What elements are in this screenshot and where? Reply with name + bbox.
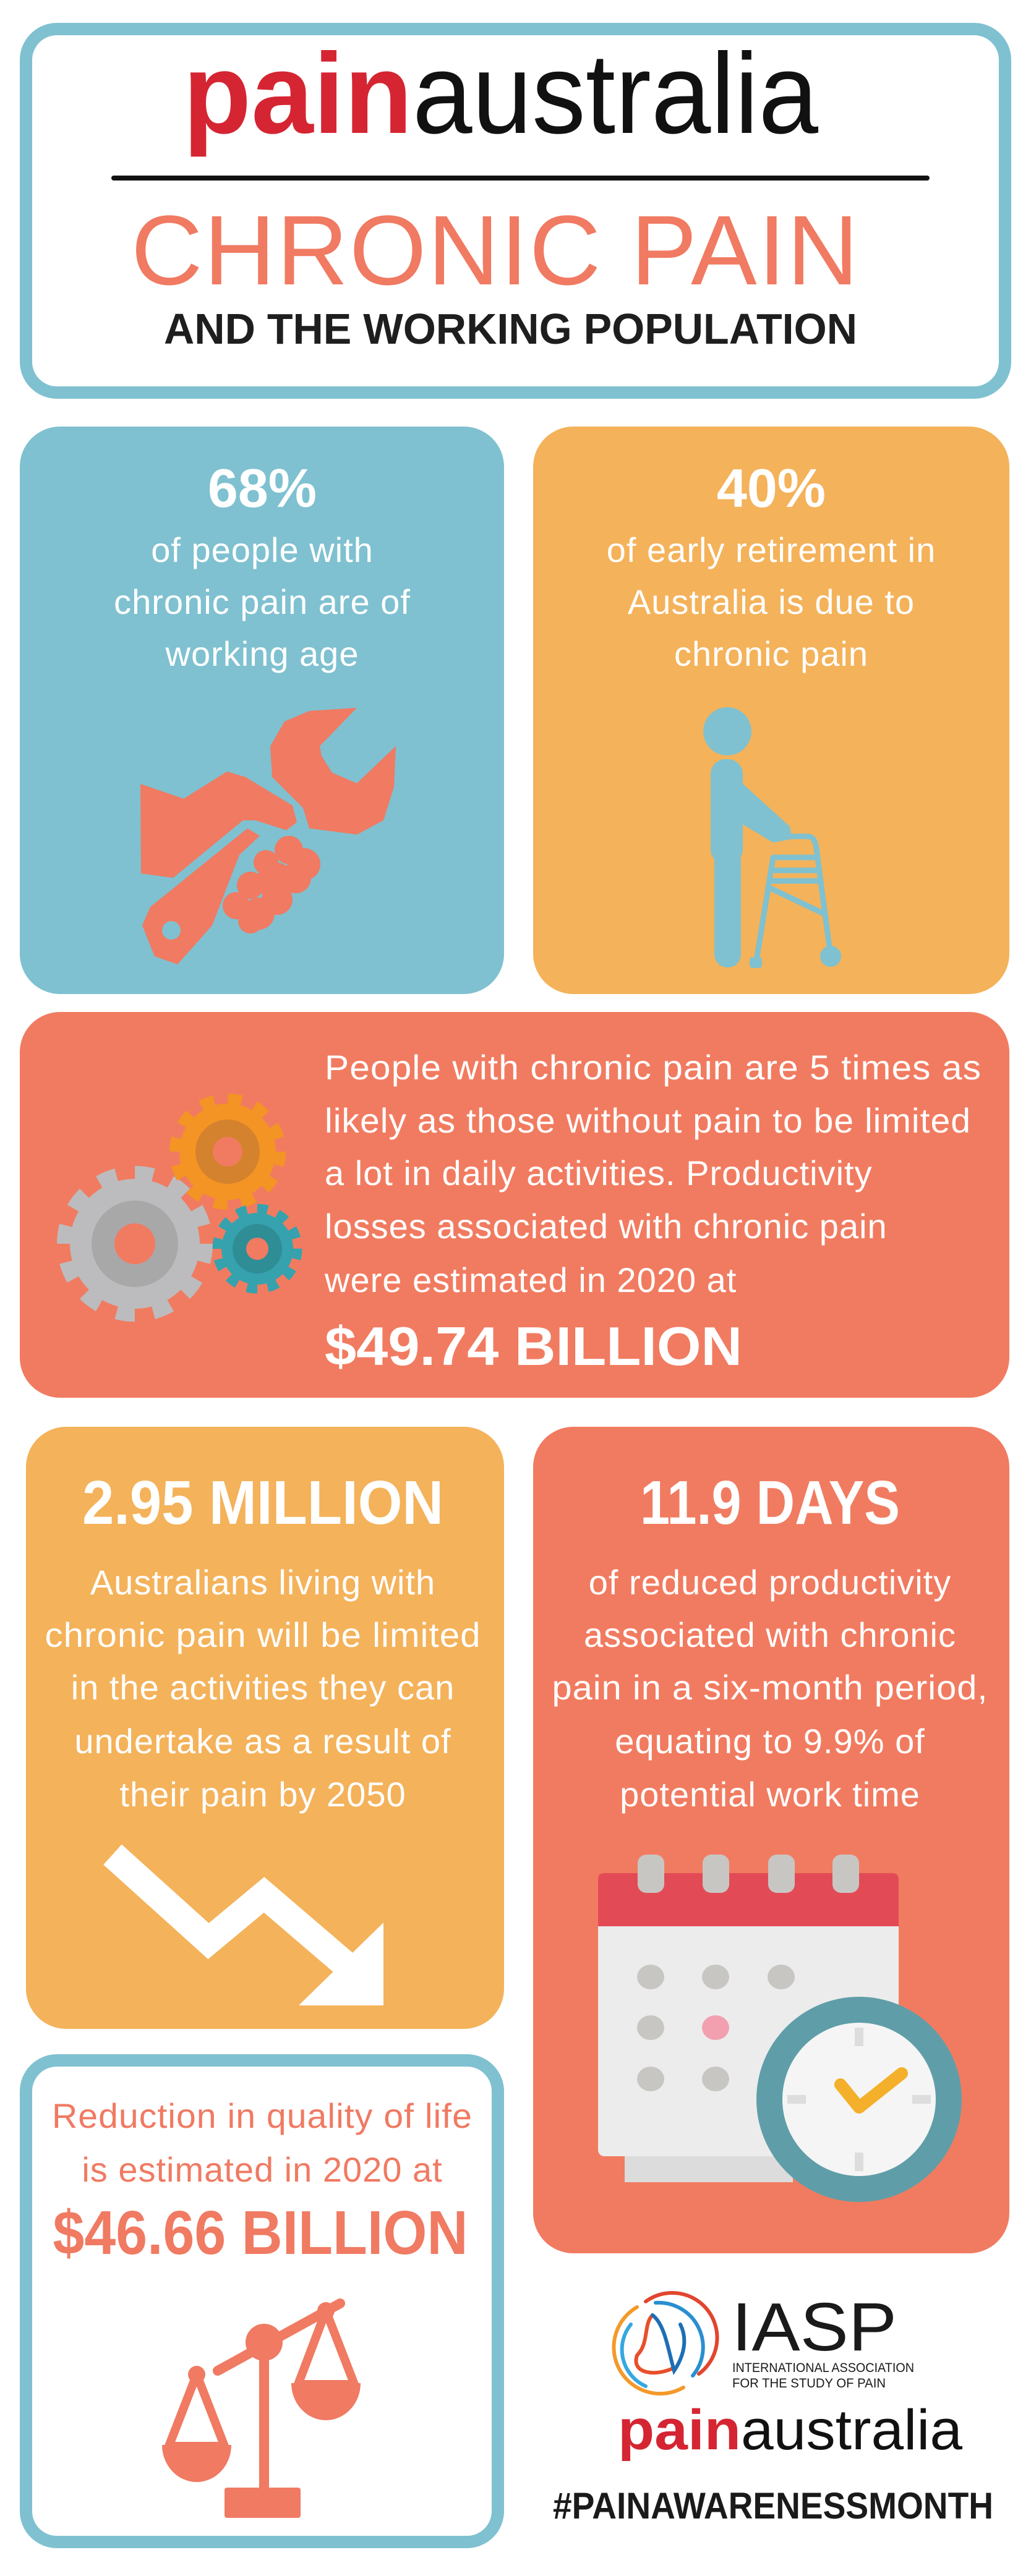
text block: their pain by 2050 (119, 1775, 406, 1814)
text block (324, 1048, 982, 1299)
text block: chronic pain are of (114, 582, 411, 621)
text block (45, 1563, 481, 1814)
icon: gears (64, 1099, 297, 1315)
text block: equating to 9.9% of (615, 1722, 925, 1761)
logo: IASP (614, 2289, 914, 2394)
subtitle: AND THE WORKING POPULATION (164, 305, 857, 353)
text block: undertake as a result of (74, 1722, 451, 1761)
text block: losses associated with chronic pain (325, 1207, 888, 1246)
logo: IASP: FOR THE STUDY OF PAIN (732, 2376, 886, 2391)
text block: potential work time (620, 1775, 920, 1814)
text block (552, 1563, 988, 1814)
icon: down trend arrow (113, 1855, 383, 2005)
icon: calendar with clock (598, 1855, 962, 2202)
panel: 68% working age (20, 427, 504, 994)
text block: working age (165, 634, 359, 673)
logo: IASP: INTERNATIONAL ASSOCIATION (732, 2361, 914, 2375)
icon: hand holding wrench (140, 708, 396, 964)
text block: Australians living with (90, 1563, 435, 1602)
logo: painaustralia bottom: pain (618, 2399, 741, 2462)
logo: IASP: IASP (732, 2289, 897, 2365)
header panel (26, 29, 1005, 393)
text block: Australia is due to (628, 582, 915, 621)
text block (114, 530, 411, 673)
text block: pain in a six-month period, (552, 1668, 988, 1707)
logo: painaustralia top: pain (183, 30, 413, 158)
logo: painaustralia bottom (618, 2399, 963, 2462)
icon: scales (162, 2302, 361, 2518)
text block: likely as those without pain to be limited (325, 1101, 971, 1140)
stat $46.66 BILLION: $46.66 BILLION (53, 2198, 468, 2268)
text block: Reduction in quality of life (52, 2096, 473, 2135)
logo: painaustralia bottom: australia (741, 2399, 963, 2462)
text block: in the activities they can (71, 1668, 455, 1707)
stat 2.95 MILLION: 2.95 MILLION (82, 1468, 443, 1537)
stat 11.9 DAYS: 11.9 DAYS (640, 1468, 900, 1537)
logo: painaustralia top (183, 30, 818, 158)
text block: People with chronic pain are 5 times as (325, 1048, 982, 1087)
text block: of people with (151, 530, 374, 569)
icon: person with walker (703, 707, 841, 968)
stat 68%: 68% (208, 457, 317, 519)
stat 40%: 40% (717, 457, 826, 519)
text block: is estimated in 2020 at (82, 2150, 443, 2189)
logo: painaustralia top: australia (413, 30, 818, 158)
stat $49.74 BILLION: $49.74 BILLION (325, 1316, 742, 1377)
icon: IASP swirl (614, 2293, 717, 2394)
panel: quality of life (26, 2060, 498, 2542)
text block: a lot in daily activities. Productivity (325, 1154, 873, 1192)
text block: chronic pain (674, 634, 868, 673)
panel: 11.9 days (533, 1427, 1009, 2253)
text block: of early retirement in (607, 530, 936, 569)
panel: productivity losses (20, 1012, 1009, 1398)
text block: associated with chronic (584, 1615, 956, 1654)
text block: were estimated in 2020 at (324, 1260, 737, 1299)
hashtag: #PAINAWARENESSMONTH (553, 2485, 993, 2527)
text block (607, 530, 936, 673)
text block: chronic pain will be limited (45, 1615, 481, 1654)
title: CHRONIC PAIN: CHRONIC PAIN (131, 195, 858, 305)
text block: of reduced productivity (589, 1563, 951, 1602)
text block (52, 2096, 473, 2189)
panel: 40% early retirement (533, 427, 1009, 994)
panel: 2.95 million (26, 1427, 504, 2029)
